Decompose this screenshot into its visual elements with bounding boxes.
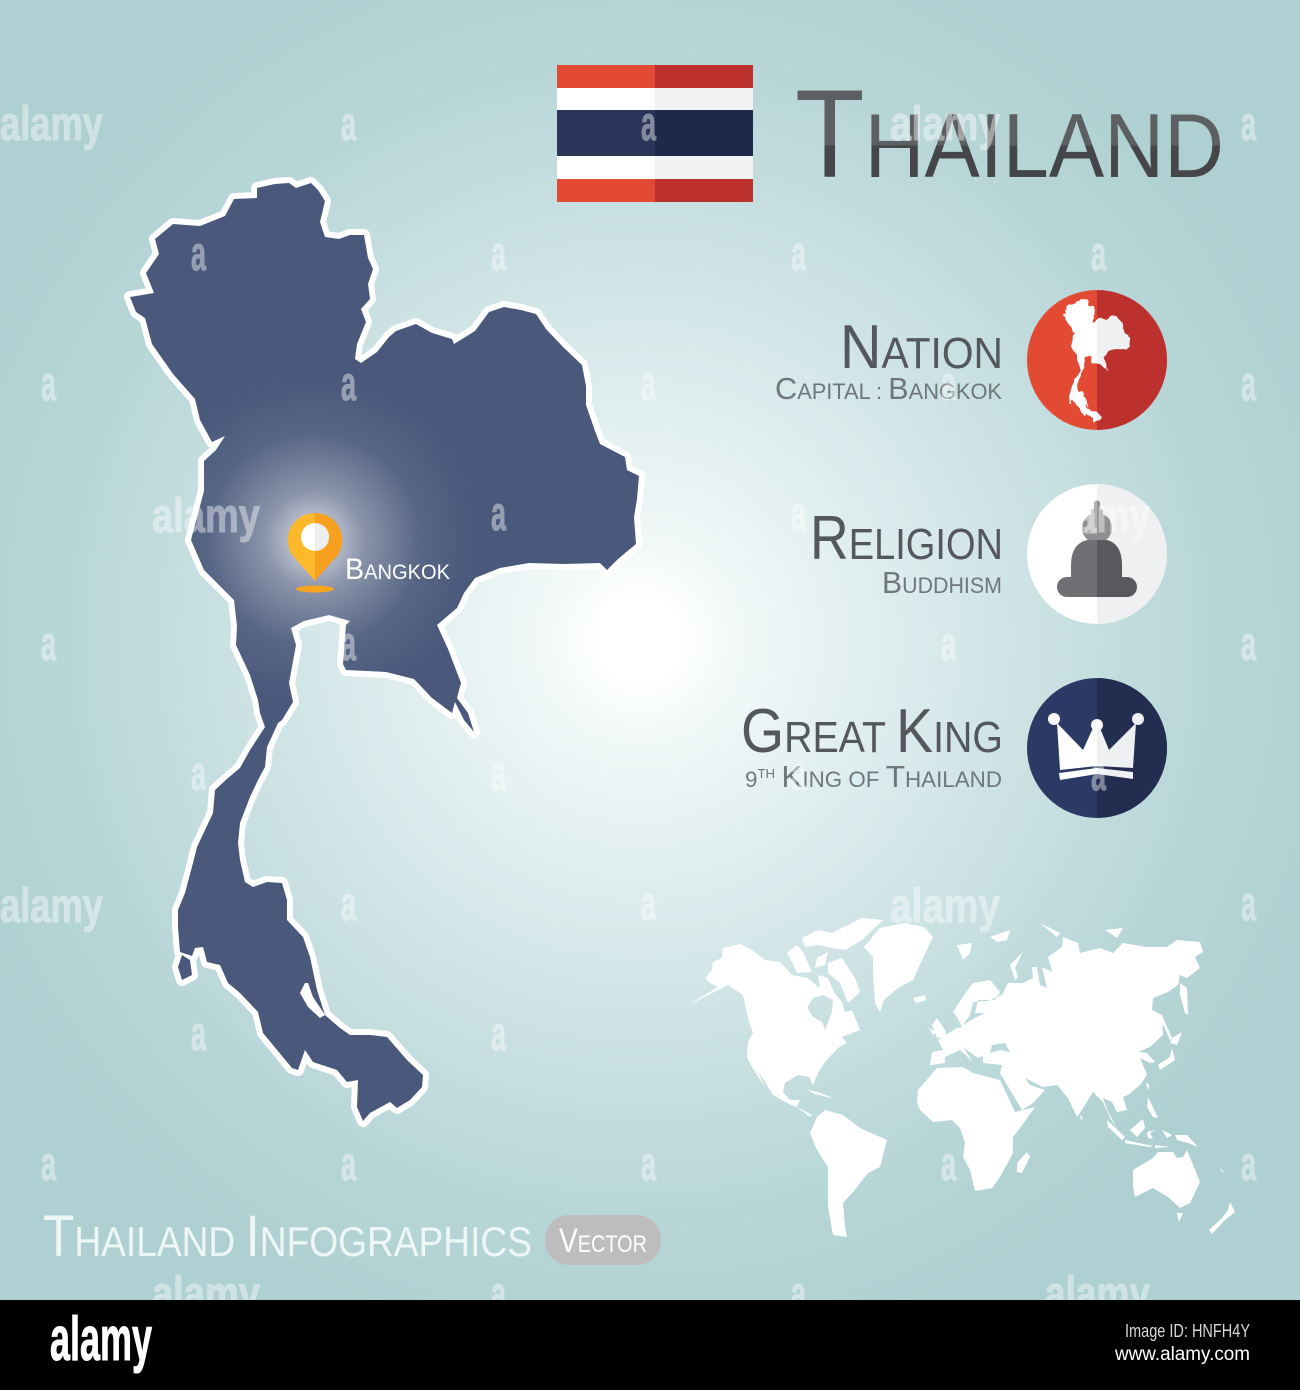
- watermarks: a: [1241, 878, 1256, 931]
- title: THAILAND: [795, 65, 1224, 204]
- watermarks: a: [941, 1138, 956, 1191]
- watermarks: a: [491, 228, 506, 281]
- watermarks: alamy: [1045, 490, 1150, 543]
- South America: [810, 1110, 887, 1237]
- watermarks: a: [341, 358, 356, 411]
- watermarks: a: [341, 98, 356, 151]
- text: 9th King of Thailand: 9: [745, 767, 757, 792]
- watermarks: a: [641, 358, 656, 411]
- watermarks: a: [1241, 358, 1256, 411]
- watermarks: a: [491, 1268, 506, 1321]
- North America: [687, 944, 860, 1117]
- heading: Religion: RELIGION: [810, 504, 1003, 573]
- row: Nation: [775, 290, 1167, 430]
- Eurasian islands: [929, 923, 1198, 1148]
- heading: Great King: GREAT KING: [741, 697, 1003, 766]
- row: Great King: [741, 678, 1167, 818]
- world map: [687, 918, 1235, 1237]
- footer title: THAILAND INFOGRAPHICS: [43, 1204, 532, 1269]
- watermarks: a: [641, 1138, 656, 1191]
- watermarks: a: [341, 1138, 356, 1191]
- capital glow: [130, 183, 639, 1121]
- icon: location pin: [288, 513, 342, 592]
- footer bar: [0, 1300, 1300, 1390]
- Thailand flag: [557, 65, 753, 202]
- watermarks: a: [1091, 1008, 1106, 1061]
- watermarks: a: [191, 228, 206, 281]
- watermarks: a: [41, 1138, 56, 1191]
- icon: crown badge: [1027, 678, 1167, 818]
- watermarks: alamy: [0, 98, 103, 151]
- watermarks: a: [791, 1008, 806, 1061]
- watermarks: a: [1241, 98, 1256, 151]
- watermarks: a: [491, 488, 506, 541]
- badge: Vector: VECTOR: [559, 1222, 647, 1260]
- row: Religion: [810, 484, 1167, 624]
- watermarks: a: [491, 1008, 506, 1061]
- map of Thailand: [130, 183, 639, 1121]
- watermarks: alamy: [1045, 1268, 1150, 1321]
- Arctic islands and Greenland: [787, 918, 933, 1098]
- watermarks: a: [41, 358, 56, 411]
- image id: Image ID: HNFH4Y: [1125, 1321, 1250, 1341]
- watermarks: a: [341, 618, 356, 671]
- watermarks: a: [791, 228, 806, 281]
- Australia and New Zealand: [1133, 1150, 1235, 1234]
- watermarks: a: [341, 878, 356, 931]
- watermarks: a: [191, 1008, 206, 1061]
- watermarks: a: [41, 618, 56, 671]
- icon: Buddha badge: [1027, 484, 1167, 624]
- text: 9th King of Thailand: KING OF THAILAND: [781, 759, 1000, 794]
- watermarks: a: [1091, 748, 1106, 801]
- watermarks: a: [191, 748, 206, 801]
- heading: Nation: NATION: [840, 313, 1003, 382]
- watermarks: alamy: [152, 1268, 260, 1321]
- watermarks: a: [1091, 228, 1106, 281]
- watermarks: a: [1241, 1138, 1256, 1191]
- watermarks: a: [1241, 618, 1256, 671]
- logo: alamy: alamy: [50, 1305, 152, 1374]
- watermarks: a: [791, 488, 806, 541]
- icon: Thailand badge: [1027, 290, 1167, 430]
- Africa: [917, 1067, 1035, 1191]
- watermarks: a: [491, 748, 506, 801]
- site url: www.alamy.com: [1114, 1344, 1250, 1365]
- watermarks: alamy: [890, 98, 1000, 151]
- watermarks: a: [941, 618, 956, 671]
- text: 9th King of Thailand: TH: [757, 766, 775, 781]
- watermarks: a: [641, 618, 656, 671]
- watermarks: alamy: [890, 880, 1000, 933]
- watermarks: a: [941, 358, 956, 411]
- watermarks: a: [641, 878, 656, 931]
- text: Buddhism: BUDDHISM: [882, 565, 1002, 600]
- badge: Vector: [545, 1215, 661, 1265]
- label: Bangkok: BANGKOK: [345, 553, 450, 586]
- watermarks: a: [641, 98, 656, 151]
- text: capital: CAPITAL : BANGKOK: [775, 371, 1002, 406]
- watermarks: alamy: [0, 880, 103, 933]
- watermarks: a: [791, 748, 806, 801]
- watermarks: alamy: [152, 490, 260, 543]
- Eurasia: [930, 937, 1203, 1128]
- watermarks: a: [791, 1268, 806, 1321]
